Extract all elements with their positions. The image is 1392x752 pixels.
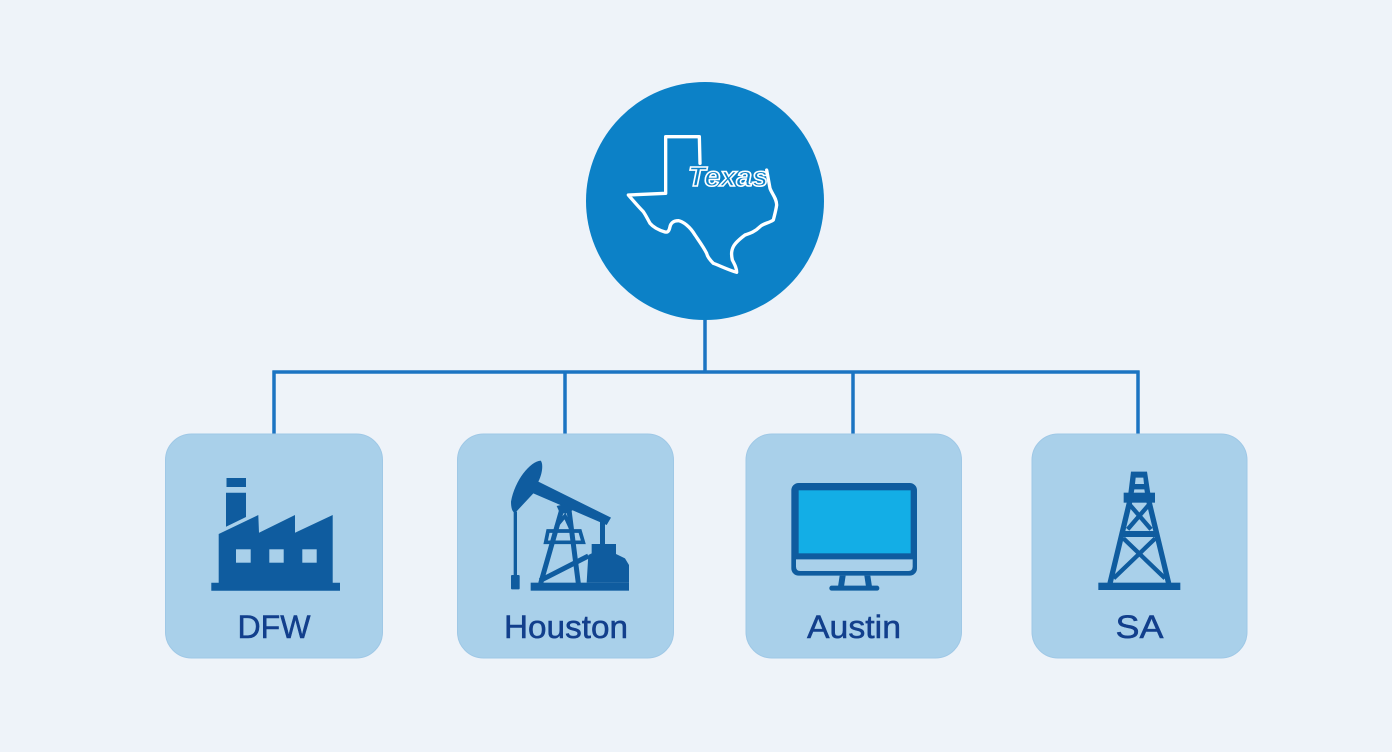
icon: oil pump jack <box>511 461 629 591</box>
label: Houston: Houston <box>504 609 628 645</box>
label: Texas: Texas <box>688 161 768 192</box>
label: DFW: DFW <box>238 609 311 645</box>
icon: computer monitor <box>791 483 917 591</box>
card: Houston <box>458 434 674 658</box>
hub circle: Texas <box>586 82 824 320</box>
icon: Texas state outline <box>628 137 777 272</box>
icon: factory <box>211 478 340 591</box>
icon: oil derrick <box>1098 472 1180 590</box>
card: DFW <box>166 434 382 658</box>
card: Austin <box>746 434 962 658</box>
label: SA: SA <box>1116 609 1164 645</box>
label: Austin: Austin <box>807 609 901 645</box>
connector tree <box>272 318 1140 434</box>
card: SA <box>1032 434 1247 658</box>
